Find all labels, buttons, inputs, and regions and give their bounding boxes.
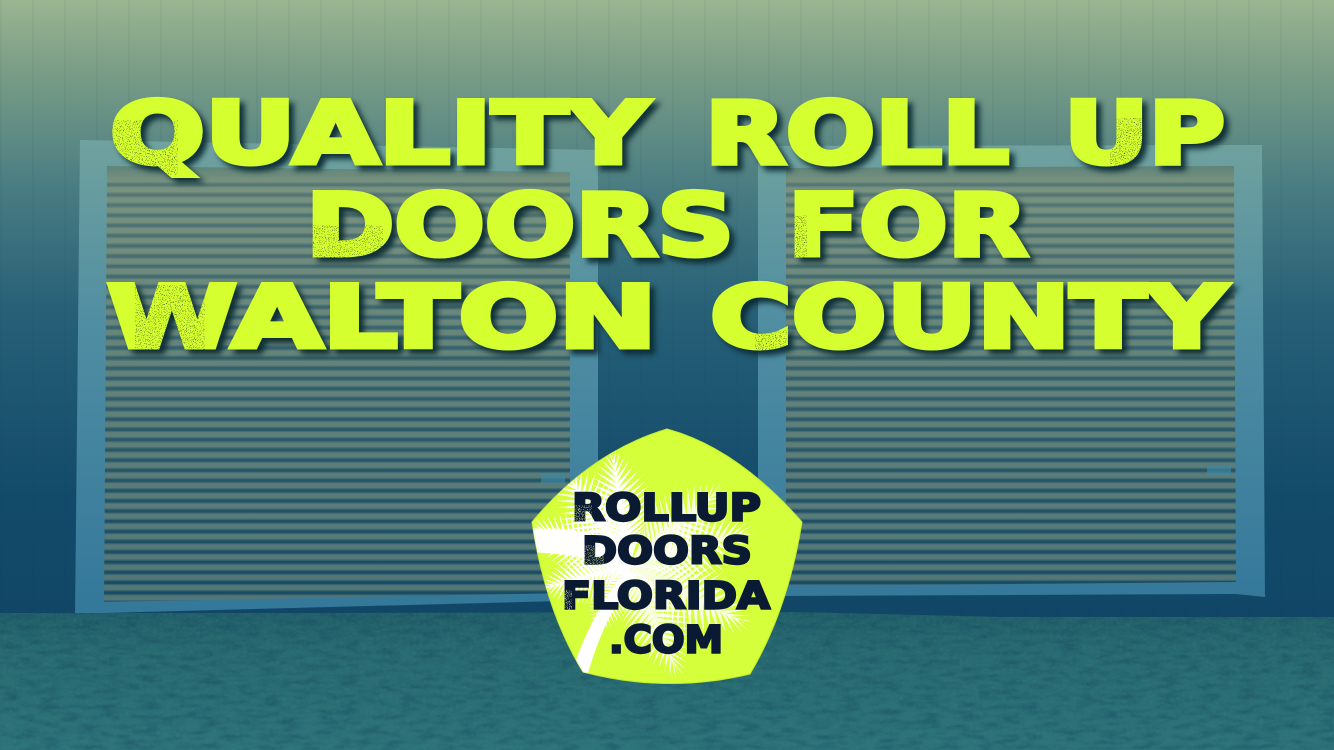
left door latch xyxy=(541,473,565,484)
left door frame xyxy=(75,140,598,616)
title: WALTON xyxy=(107,268,657,368)
icon: palm tree xyxy=(532,451,756,680)
right door frame xyxy=(758,145,1265,597)
logo shield shape xyxy=(532,429,802,684)
title: QUALITY xyxy=(110,84,651,184)
logo text: .COM xyxy=(609,618,723,662)
logo text xyxy=(562,486,770,662)
title: COUNTY xyxy=(710,268,1229,368)
right roll up door xyxy=(758,145,1265,597)
right door curtain xyxy=(786,166,1236,586)
title: UP xyxy=(1064,84,1225,184)
logo badge xyxy=(516,429,802,692)
title: ROLL xyxy=(705,84,1009,184)
title xyxy=(107,84,1229,368)
right door latch xyxy=(1207,465,1231,476)
logo text: DOORS xyxy=(582,528,752,572)
grass foreground xyxy=(0,605,1334,750)
title: FOR xyxy=(788,176,1028,276)
left door curtain xyxy=(104,166,570,602)
logo text: FLORIDA xyxy=(562,574,770,618)
title: DOORS xyxy=(306,176,734,276)
logo text: ROLLUP xyxy=(572,486,761,530)
left roll up door xyxy=(75,140,598,616)
